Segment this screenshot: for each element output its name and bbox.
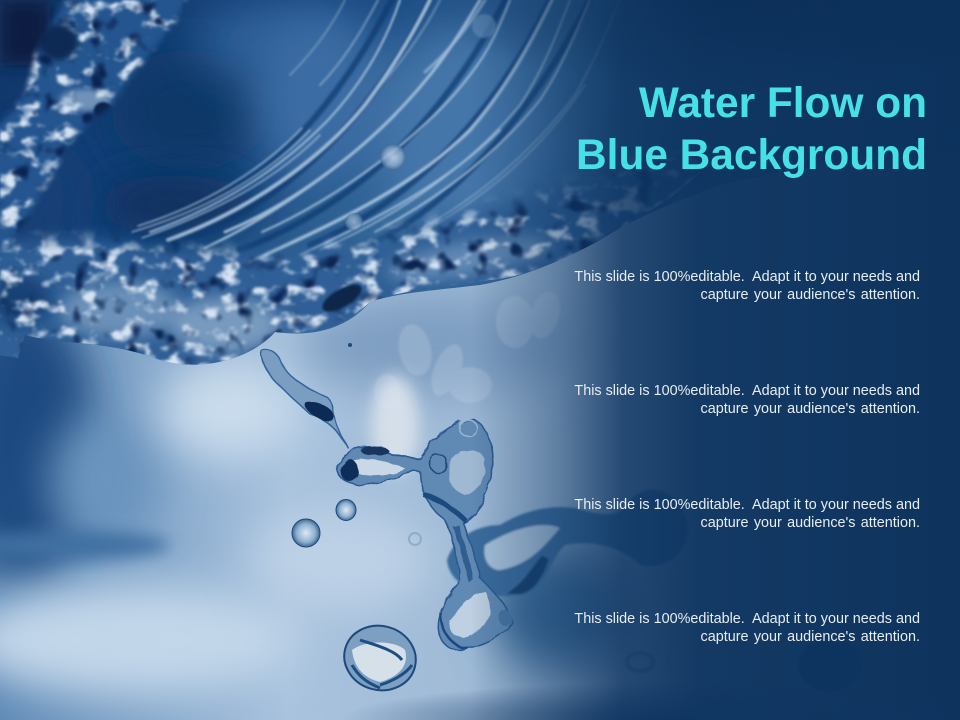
large drop xyxy=(337,618,423,698)
ghost splash behind the text column xyxy=(447,490,862,691)
curved flow streaks xyxy=(132,0,620,262)
small bubbles on the sheet xyxy=(345,14,496,347)
bokeh circles xyxy=(374,288,565,410)
title: Blue Background xyxy=(576,131,927,178)
title: Water Flow on xyxy=(639,79,927,126)
foam band along the splash edge xyxy=(0,156,692,365)
text block 4: This slide is 100%editable. Adapt it to your needs and capture your audience's attention. xyxy=(574,611,920,645)
dark gradient veil on the right xyxy=(340,0,960,720)
title xyxy=(576,79,927,178)
text block 2: This slide is 100%editable. Adapt it to your needs and capture your audience's attention. xyxy=(574,383,920,417)
text block 3: This slide is 100%editable. Adapt it to your needs and capture your audience's attention. xyxy=(574,497,920,531)
foam clusters in top left corner xyxy=(0,0,188,248)
background photo: water splash xyxy=(0,0,692,720)
small drops xyxy=(292,500,421,547)
text block 1: This slide is 100%editable. Adapt it to your needs and capture your audience's attention. xyxy=(574,269,920,303)
water sheet xyxy=(0,0,960,365)
falling water stream xyxy=(262,349,512,649)
